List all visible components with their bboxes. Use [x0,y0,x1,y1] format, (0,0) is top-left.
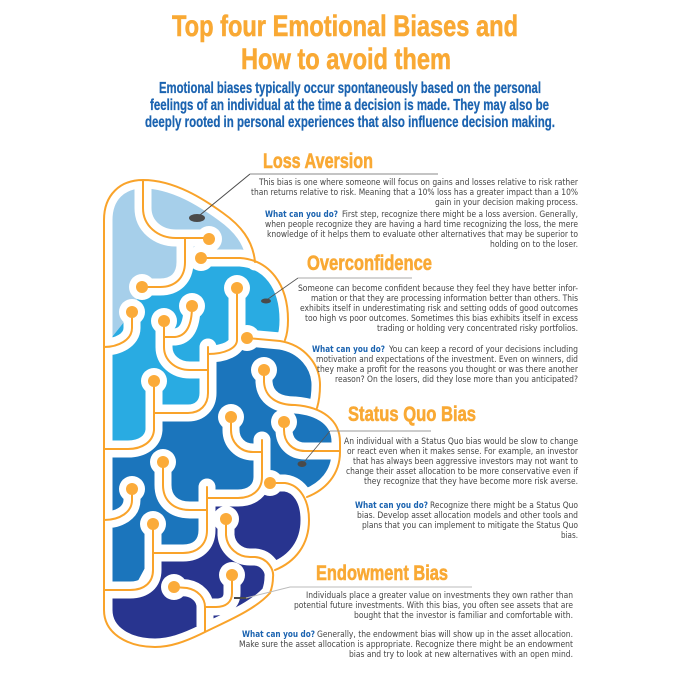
description: overconfidence [298,283,578,334]
advice: overconfidence: motivation and expectations of the investment. Even on winners, did [316,354,578,365]
title [172,10,518,76]
description: endowment bias: potential future investments. With this bias, you often see assets that are [294,600,573,611]
panel: loss aversion [251,149,578,250]
white circuit channels [104,180,340,647]
node halos [119,226,297,600]
title: Top four Emotional Biases and [172,10,518,43]
callout: loss aversion pointer [189,174,438,222]
advice: overconfidence: they make a profit for the reasons you thought or was there another [317,364,578,375]
description: status quo bias: An individual with a Status Quo bias would be slow to change [344,436,578,447]
advice: overconfidence: reason? On the losers, did they lose more than you anticipated? [335,374,578,385]
description: endowment bias: bought that the investor is familiar and comfortable with. [354,610,573,621]
callout: endowment pointer [234,587,472,599]
description: overconfidence: Someone can become confident because they feel they have better infor- [298,283,578,294]
advice: endowment bias: bias and try to look at new alternatives with an open mind. [349,649,573,660]
description: overconfidence: mation or that they are processing information better than others. This [311,293,578,304]
advice: overconfidence: What can you do? [312,344,385,355]
heading: status quo bias: Status Quo Bias [348,402,476,426]
advice: loss aversion: What can you do? [265,209,338,220]
panel: overconfidence [298,251,578,385]
description: status quo bias: or react even when it makes sense. For example, an investor [347,446,578,457]
advice: status quo bias: bias. [561,530,578,541]
intro text: deeply rooted in personal experiences that also influence decision making. [145,114,555,131]
advice: loss aversion: knowledge of it helps them to evaluate other alternatives that may be superior to [267,229,578,240]
description: loss aversion: This bias is one where someone will focus on gains and losses relative to risk rather [258,177,578,188]
region: loss aversion light blue [104,180,255,347]
advice: loss aversion: First step, recognize there might be a loss aversion. Generally, [342,209,578,220]
region: status quo dark blue [104,338,340,590]
title: How to avoid them [241,43,451,76]
intro text [145,80,555,131]
advice: overconfidence: You can keep a record of your decisions including [388,344,578,355]
advice: status quo bias: plans that you can implement to mitigate the Status Quo [362,520,578,531]
advice: loss aversion [265,209,578,250]
intro text: Emotional biases typically occur spontaneously based on the personal [159,80,541,97]
advice: status quo bias: bias. Develop asset allocation models and other tools and [357,510,578,521]
description: loss aversion: than returns relative to risk. Meaning that a 10% loss has a greater impact than a 10% [251,187,578,198]
heading: overconfidence: Overconfidence [307,251,432,275]
description: status quo bias: change their asset allocation to be more conservative even if [346,466,579,477]
advice: status quo bias: What can you do? [355,500,428,511]
description: overconfidence: too high vs poor outcomes. Sometimes this bias exhibits itself in excess [305,313,578,324]
orange circuit lines [104,180,340,647]
advice: endowment bias: Generally, the endowment bias will show up in the asset allocation. [317,629,573,640]
heading: loss aversion: Loss Aversion [263,149,373,173]
intro text: feelings of an individual at the time a decision is made. They may also be [150,97,549,114]
advice: loss aversion: when people recognize they are having a hard time recognizing the loss, the mere [265,219,578,230]
region: endowment navy [104,483,309,647]
description: endowment bias: Individuals place a greater value on investments they own rather than [306,590,573,601]
callout: status quo pointer [298,431,431,467]
description: overconfidence: trading or holding very concentrated risky portfolios. [377,323,578,334]
description: overconfidence: exhibits itself in underestimating risk and setting odds of good outcomes [300,303,578,314]
region: overconfidence blue [104,258,288,449]
panel: endowment bias [239,561,573,660]
advice: status quo bias [355,500,578,541]
advice: endowment bias [239,629,573,660]
advice: status quo bias: Recognize there might be a Status Quo [430,500,578,511]
brain circuit diagram [104,180,340,647]
orange circuit nodes [126,233,290,593]
heading: endowment bias: Endowment Bias [316,561,448,585]
description: status quo bias [344,436,579,487]
advice: overconfidence [312,344,578,385]
advice: loss aversion: holding on to the loser. [490,239,578,250]
description: status quo bias: they recognize that they have become more risk averse. [364,476,578,487]
callout: overconfidence pointer [261,278,412,304]
description: status quo bias: that has always been aggressive investors may not want to [353,456,578,467]
description: loss aversion [251,177,578,208]
description: endowment bias [294,590,573,621]
panel: status quo bias [344,402,579,541]
description: loss aversion: gain in your decision making process. [435,197,578,208]
advice: endowment bias: Make sure the asset allocation is appropriate. Recognize there might be an endowment [239,639,573,650]
advice: endowment bias: What can you do? [242,629,315,640]
